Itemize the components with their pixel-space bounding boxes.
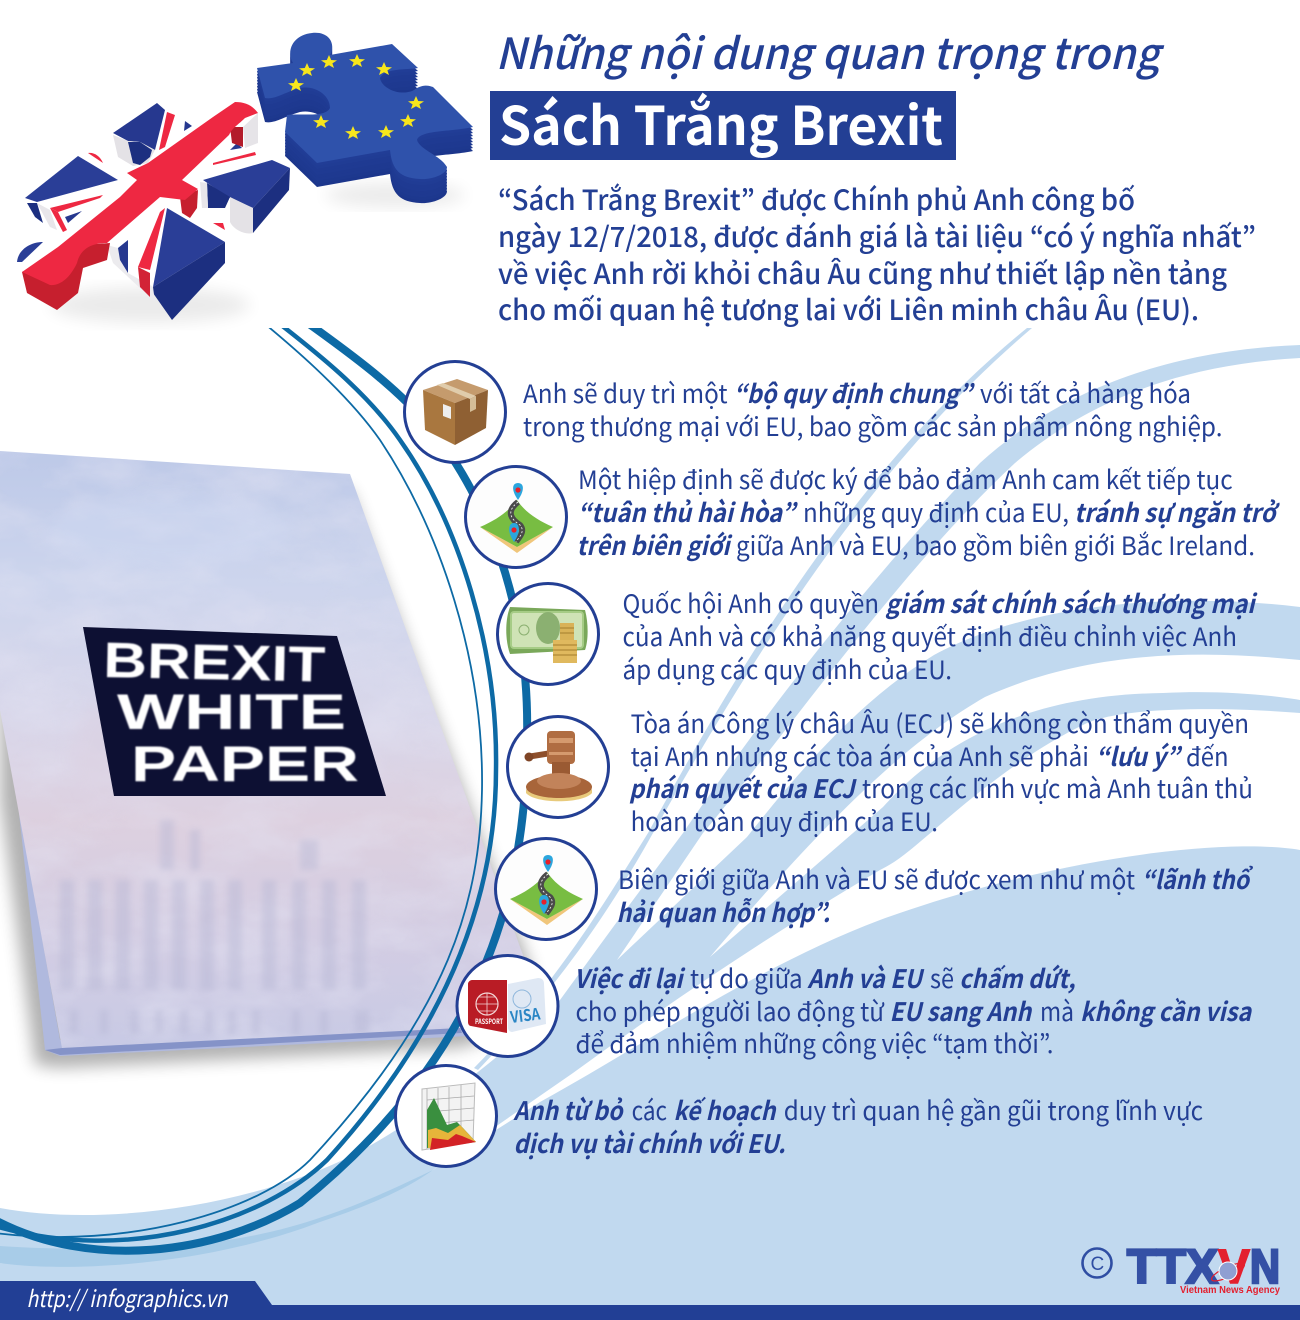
logo: TTXVN: N: [1250, 1241, 1280, 1294]
item 3 text: [622, 584, 1258, 687]
item 2 text: tránh sự ngăn trở: [1074, 493, 1280, 530]
item 6 text: sẽ: [930, 959, 954, 996]
intro paragraph: [498, 179, 1256, 329]
item 2 text: “tuân thủ hài hòa”: [578, 493, 798, 530]
intro paragraph: ngày 12/7/2018, được đánh giá là tài liệu “có ý nghĩa nhất”: [498, 216, 1256, 256]
item 6 text: mà: [1040, 992, 1074, 1029]
item 6 icon: passport and visa: [457, 956, 558, 1056]
item 6 text: Anh và EU: [807, 959, 925, 996]
paper label: WHITE: [117, 684, 346, 740]
item 1 text: với tất cả hàng hóa: [980, 374, 1191, 411]
item 3 text: của Anh và có khả năng quyết định điều chỉnh việc Anh: [622, 617, 1237, 654]
illustration: brexit white paper document: [0, 445, 532, 1068]
item 5 icon: map route: [496, 838, 596, 940]
item 7 text: [513, 1091, 1203, 1161]
item 2 icon: map route: [466, 466, 566, 568]
item 3 text: áp dụng các quy định của EU.: [622, 650, 952, 687]
item 7 text: các: [632, 1091, 667, 1128]
item 4 text: Tòa án Công lý châu Âu (ECJ) sẽ không còn thẩm quyền: [631, 704, 1249, 741]
item 6 text: cho phép người lao động từ: [576, 992, 884, 1029]
logo: TTXVN: V: [1218, 1241, 1250, 1294]
item 7 text: dịch vụ tài chính với EU.: [514, 1124, 786, 1161]
decorative arcs: [0, 310, 527, 1251]
item 2 text: giữa Anh và EU, bao gồm biên giới Bắc Ireland.: [736, 526, 1255, 563]
item 7 icon: chart: [396, 1066, 496, 1166]
item 5 text: “lãnh thổ: [1142, 860, 1254, 897]
logo: TTXVN: Vietnam News Agency: [1180, 1284, 1280, 1296]
UK piece: [17, 102, 290, 320]
paper label: BREXIT: [103, 632, 326, 693]
item 4 text: “lưu ý”: [1096, 737, 1183, 774]
item 6 text: EU sang Anh: [890, 992, 1033, 1029]
item 4 icon: gavel: [508, 716, 608, 818]
paper label: PAPER: [131, 736, 359, 792]
item 2 text: Một hiệp định sẽ được ký để bảo đảm Anh cam kết tiếp tục: [578, 460, 1233, 497]
item 5 text: hải quan hỗn hợp”.: [616, 893, 830, 930]
item 6 text: để đảm nhiệm những công việc “tạm thời”.: [576, 1024, 1054, 1061]
intro paragraph: “Sách Trắng Brexit” được Chính phủ Anh công bố: [498, 179, 1135, 219]
logo: TTXVN: [1082, 1241, 1280, 1296]
item 4 text: đến: [1186, 737, 1229, 774]
item 2 text: những quy định của EU,: [803, 493, 1069, 530]
item 1 icon: cardboard box: [404, 362, 506, 462]
item 6 text: Việc đi lại: [574, 959, 686, 996]
item 2 text: trên biên giới: [576, 526, 733, 563]
intro paragraph: về việc Anh rời khỏi châu Âu cũng như thiết lập nền tảng: [498, 253, 1227, 293]
item 3 icon: money: [498, 584, 598, 684]
item 6 icon: passport and visa: PASSPORT: [475, 1017, 503, 1027]
title: Những nội dung quan trọng trong: [496, 20, 1164, 82]
item 7 text: duy trì quan hệ gần gũi trong lĩnh vực: [784, 1091, 1203, 1128]
item 1 text: [523, 374, 1222, 444]
item 1 text: trong thương mại với EU, bao gồm các sản phẩm nông nghiệp.: [523, 407, 1222, 444]
item 3 text: Quốc hội Anh có quyền: [622, 584, 879, 621]
item 4 text: [629, 704, 1253, 839]
title highlight: Sách Trắng Brexit: [499, 85, 943, 161]
EU piece: [257, 33, 473, 203]
item 6 icon: passport and visa: VISA: [508, 1000, 542, 1028]
item 7 text: kế hoạch: [674, 1091, 777, 1128]
intro paragraph: cho mối quan hệ tương lai với Liên minh châu Âu (EU).: [498, 289, 1199, 329]
title: [490, 20, 1164, 161]
item 4 text: hoàn toàn quy định của EU.: [631, 802, 938, 839]
footer bar: http:// infographics.vn: [26, 1280, 228, 1314]
item 6 text: không cần visa: [1080, 992, 1253, 1029]
illustration: UK and EU jigsaw pieces: [17, 33, 473, 323]
item 7 text: Anh từ bỏ: [513, 1091, 624, 1128]
item 3 text: giám sát chính sách thương mại: [885, 584, 1258, 621]
item 6 text: [574, 959, 1253, 1061]
item 6 text: chấm dứt,: [959, 959, 1076, 996]
item 4 text: trong các lĩnh vực mà Anh tuân thủ: [862, 769, 1253, 806]
logo: TTXVN: TTX: [1127, 1241, 1218, 1294]
item 4 text: phán quyết của ECJ: [629, 769, 857, 806]
logo: TTXVN: C: [1090, 1254, 1104, 1275]
background swooshes: [0, 328, 1300, 1320]
item 6 text: tự do giữa: [690, 959, 803, 996]
paper label: [83, 627, 386, 796]
item 2 text: [576, 460, 1280, 563]
item 5 text: Biên giới giữa Anh và EU sẽ được xem như một: [618, 860, 1135, 897]
footer bar: [0, 1280, 1300, 1320]
item 1 text: “bộ quy định chung”: [734, 374, 975, 411]
item 5 text: [616, 860, 1254, 930]
item 4 text: tại Anh nhưng các tòa án của Anh sẽ phải: [631, 737, 1089, 774]
item 1 text: Anh sẽ duy trì một: [523, 374, 728, 411]
